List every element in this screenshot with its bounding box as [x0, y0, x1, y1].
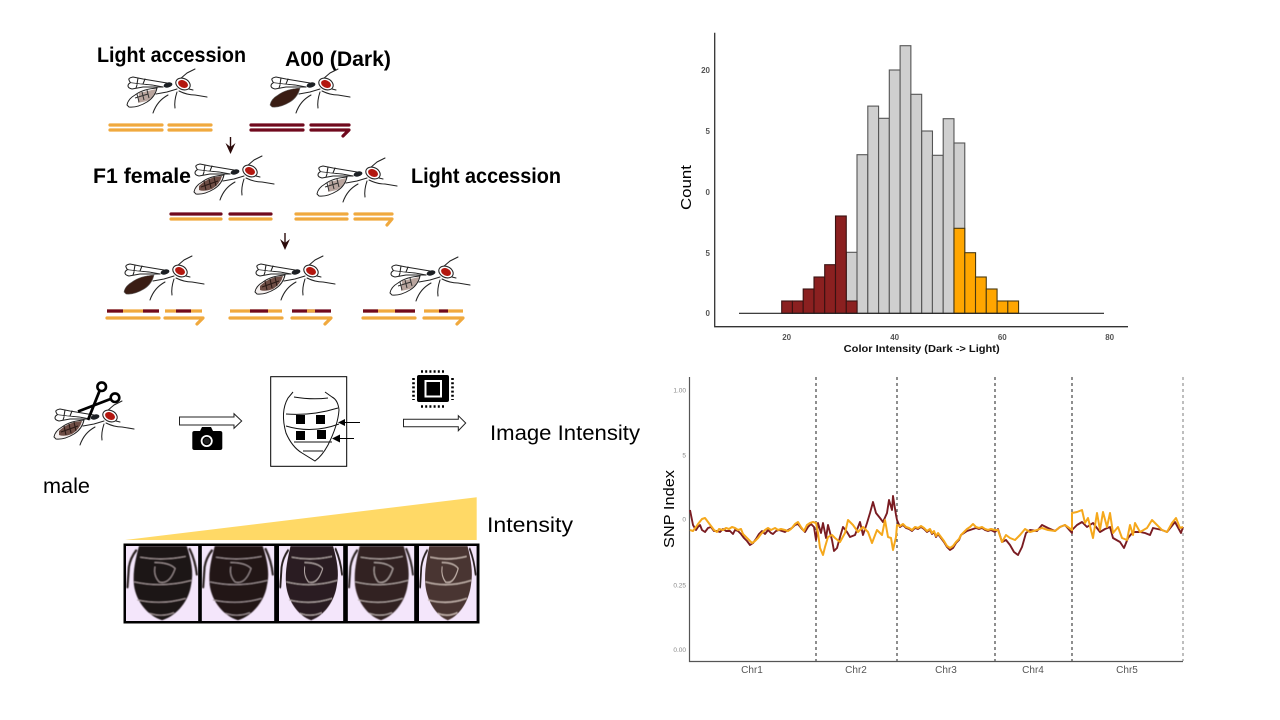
icon: male fly	[54, 401, 134, 445]
photo: darkest abdomen	[126, 546, 198, 621]
y axis title: Count	[678, 164, 695, 210]
x tick labels: 20	[782, 333, 792, 342]
y tick labels: 20	[701, 66, 711, 75]
label: male: male	[43, 475, 90, 498]
y tick labels: 1.00	[673, 388, 686, 394]
photo: medium abdomen	[279, 546, 343, 621]
y tick labels: 0.00	[673, 647, 686, 654]
y tick labels: 0	[682, 516, 686, 524]
y tick labels: 5	[682, 452, 686, 460]
panel: imaging workflow	[43, 372, 641, 498]
x axis title: Color Intensity (Dark -> Light)	[844, 343, 1000, 355]
y tick labels	[673, 388, 686, 654]
bars: dark tail	[782, 216, 857, 313]
icon: camera	[192, 427, 222, 450]
chromosomes: light progeny	[363, 311, 463, 324]
icon: light parent fly	[127, 69, 207, 113]
photo: lightest abdomen	[419, 546, 477, 621]
line: light bulk	[690, 510, 1183, 555]
y tick labels: 0	[706, 309, 711, 318]
arrow: first cross	[226, 137, 236, 154]
label: image intensity: Image Intensity	[490, 422, 641, 445]
y tick labels: 0.25	[673, 582, 686, 590]
label: intensity: Intensity	[487, 514, 574, 537]
chart: SNP index across chromosomes	[661, 377, 1183, 676]
chromosomes: light backcross parent	[296, 214, 392, 225]
chromosome labels: Chr4	[1022, 665, 1044, 676]
wedge: intensity ramp	[125, 497, 477, 540]
bars: gray all samples	[846, 46, 965, 313]
heading: light accession parent: Light accession	[97, 44, 246, 67]
icon: scissors	[78, 382, 119, 420]
icon: dark progeny fly	[124, 256, 204, 300]
icon: dark parent fly	[270, 69, 350, 113]
chromosomes: intermediate progeny	[230, 311, 331, 324]
icon: F1 fly	[194, 156, 274, 200]
y tick labels: 5	[706, 249, 711, 258]
chromosome labels: Chr1	[741, 665, 763, 676]
photo: dark abdomen	[202, 546, 274, 621]
chromosome labels: Chr3	[935, 665, 957, 676]
diagram: abdomen with sampling squares	[271, 377, 360, 466]
bars: light tail	[954, 228, 1019, 313]
label: F1 female: F1 female	[93, 165, 191, 188]
y tick labels: 5	[706, 127, 711, 136]
chart: color intensity histogram	[678, 33, 1128, 355]
icon: light backcross fly	[317, 158, 397, 202]
chromosome labels: Chr2	[845, 665, 867, 676]
x tick labels	[782, 333, 1115, 342]
chromosome labels	[741, 665, 1138, 676]
chromosomes: F1	[171, 214, 271, 219]
panel: crossing scheme	[93, 44, 561, 324]
arrow: upper pointer	[338, 419, 360, 426]
x tick labels: 80	[1105, 333, 1115, 342]
chromosomes: dark parent	[251, 125, 349, 136]
x tick labels: 60	[998, 333, 1007, 342]
photo: lighter abdomen	[348, 546, 414, 621]
x tick labels: 40	[890, 333, 900, 342]
arrow: second cross	[280, 233, 290, 250]
icon: intermediate progeny fly	[255, 256, 335, 300]
photo strip frame	[124, 544, 480, 624]
arrow: to image	[180, 414, 242, 428]
chromosome dividers	[816, 377, 1183, 661]
y tick labels	[701, 66, 711, 318]
icon: processor chip	[414, 372, 452, 406]
panel: intensity gradient strip	[124, 497, 574, 624]
line: dark bulk	[690, 496, 1183, 555]
arrow: to intensity	[404, 416, 466, 431]
y axis title: SNP Index	[661, 469, 678, 548]
y tick labels: 0	[706, 188, 711, 197]
heading: A00 dark parent: A00 (Dark)	[285, 48, 391, 71]
arrow: lower pointer	[332, 434, 354, 442]
chromosomes: dark progeny	[107, 311, 203, 324]
chromosome labels: Chr5	[1116, 665, 1138, 676]
chromosomes: light parent	[110, 125, 211, 130]
label: light accession backcross parent: Light accession	[411, 165, 561, 188]
icon: light progeny fly	[390, 257, 470, 301]
